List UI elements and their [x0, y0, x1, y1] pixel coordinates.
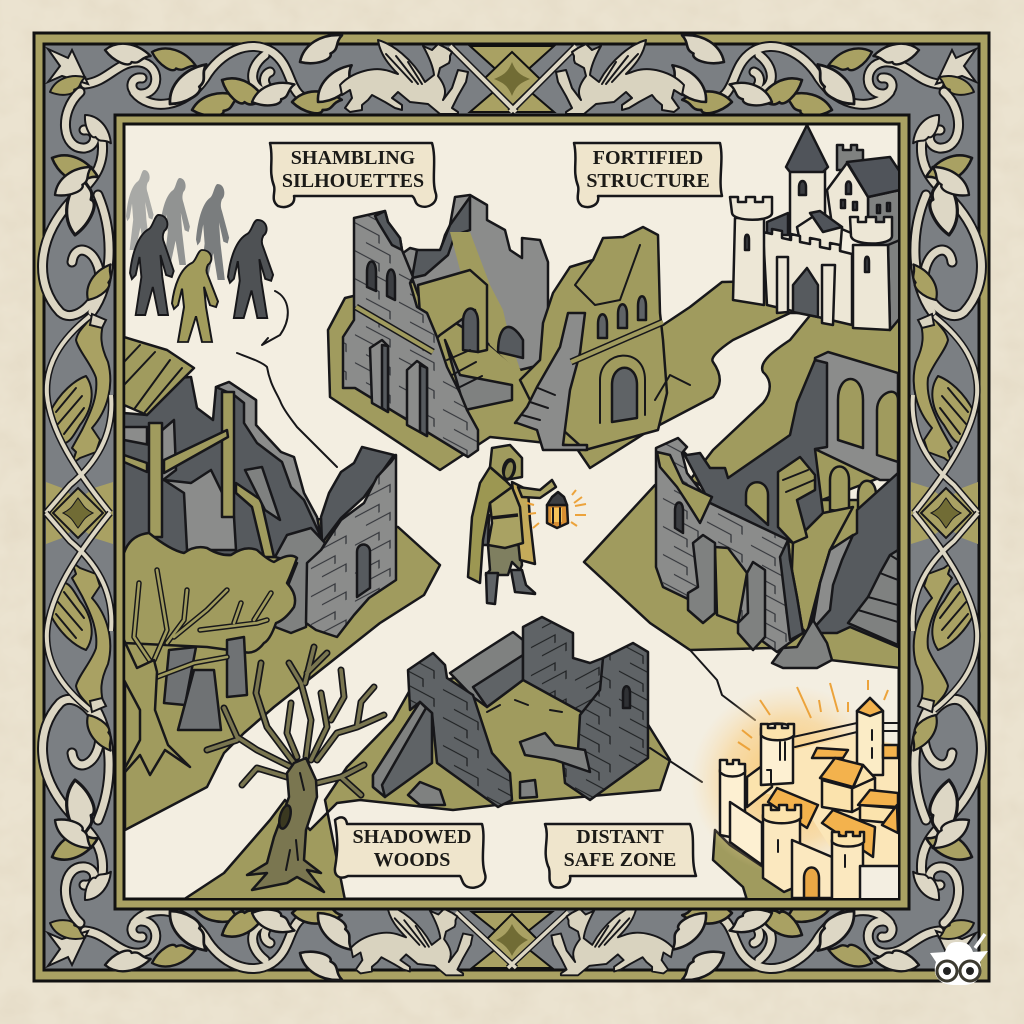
inner map panel [115, 115, 909, 909]
ruin: top-centre right [515, 227, 690, 450]
banner: distant safe zone: DISTANT [576, 826, 664, 848]
banner: shambling silhouettes: SHAMBLING [291, 147, 416, 169]
bottom griffins [351, 905, 673, 975]
banner: fortified structure: FORTIFIED [593, 147, 703, 169]
banner: distant safe zone [545, 824, 696, 888]
ruin: right arcade [656, 352, 898, 668]
lantern [527, 490, 586, 528]
ruin: left collapsed house [124, 337, 396, 637]
castle: fortified structure [730, 125, 900, 330]
banner: shadowed woods: SHADOWED [353, 826, 471, 848]
banner: fortified structure [574, 143, 722, 207]
banner: shadowed woods [335, 817, 485, 888]
oak forest [124, 533, 297, 775]
hero with lantern [468, 445, 586, 604]
banner: fortified structure: STRUCTURE [586, 170, 710, 192]
road edge lines [237, 291, 755, 782]
map contents [124, 125, 900, 900]
bottom centre diamond [456, 912, 568, 968]
side knot and dragons left [46, 314, 113, 712]
banner: shambling silhouettes [270, 143, 436, 207]
terrain patches [125, 278, 900, 900]
icon: owl logo [930, 934, 988, 985]
top griffins [340, 40, 684, 114]
safe zone: glowing walled town [690, 680, 900, 900]
top centre diamond [450, 46, 576, 112]
ruin: bottom-centre foundation [373, 617, 648, 807]
banner: shambling silhouettes: SILHOUETTES [282, 170, 424, 192]
zombies: shambling silhouettes [126, 170, 273, 342]
side knot and dragons right [911, 314, 978, 712]
dead tree [207, 647, 384, 892]
banner: distant safe zone: SAFE ZONE [564, 849, 676, 871]
banner: shadowed woods: WOODS [374, 849, 450, 871]
ruin: top-centre left [343, 195, 548, 457]
